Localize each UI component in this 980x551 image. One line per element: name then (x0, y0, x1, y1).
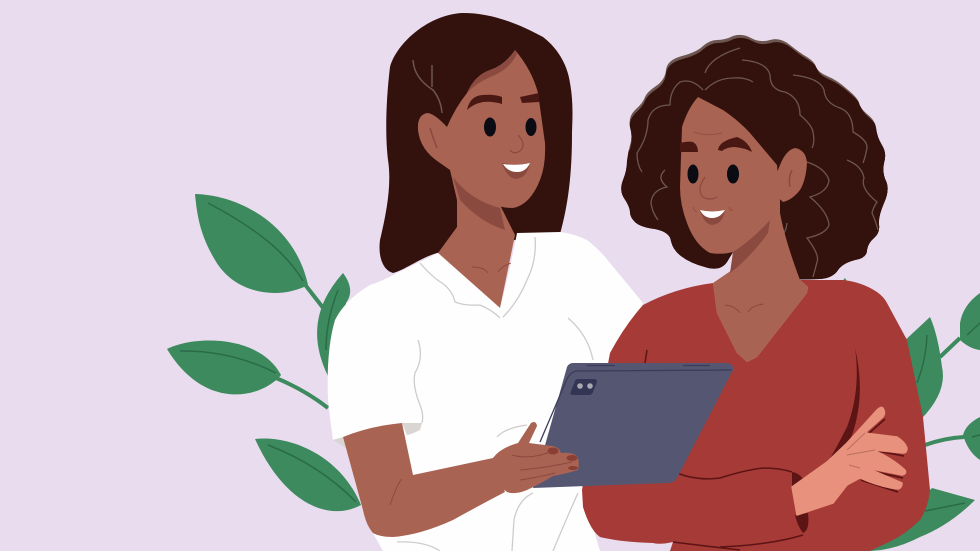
curly hair (621, 34, 888, 280)
hair strands (413, 60, 442, 113)
hand shape (792, 407, 907, 515)
leaf: right tall (900, 317, 943, 425)
tablet (533, 363, 733, 488)
shirt creases (397, 237, 593, 551)
woman in white shirt (328, 13, 643, 551)
leaf: bottom right (870, 488, 975, 551)
red sweater (582, 280, 930, 551)
ear (770, 148, 807, 202)
eyes (688, 164, 698, 184)
knuckle lines (847, 433, 875, 468)
finger lines (512, 452, 572, 480)
fingernails (548, 448, 558, 454)
stem: upper left (276, 282, 328, 408)
neck (438, 170, 515, 308)
eyebrows (680, 137, 752, 152)
eyes (484, 118, 496, 136)
eyebrows (467, 93, 539, 110)
leaf tip above shoulder (841, 278, 848, 283)
face (445, 50, 545, 208)
right foliage (841, 278, 980, 551)
hairline shadow (467, 50, 517, 93)
leaf: far right top (960, 293, 980, 350)
finger shadows (861, 419, 904, 492)
leaf: behind shirt (317, 273, 350, 380)
tablet bezel edge (540, 370, 732, 442)
wrinkles (693, 132, 733, 212)
top buttons (587, 364, 710, 366)
left foliage (167, 194, 361, 511)
camera module (570, 379, 597, 395)
right hand on crossed arm (792, 407, 907, 515)
hair (380, 13, 572, 273)
white shirt (328, 232, 643, 551)
sweater lines (645, 350, 803, 550)
woman in red sweater (493, 20, 930, 551)
leaf: top left (195, 194, 308, 293)
left hand holding tablet (493, 422, 579, 493)
leaf: bottom left (255, 439, 361, 511)
leaf: far right lower (963, 417, 980, 460)
nose (700, 177, 717, 199)
ear (418, 113, 455, 170)
mouth (700, 210, 725, 225)
stems (925, 338, 964, 445)
leaf: middle left (167, 341, 281, 394)
cuff openings (792, 472, 808, 533)
nose (510, 135, 523, 153)
hair curl strands (637, 48, 878, 277)
neck (713, 200, 808, 362)
face (680, 97, 780, 254)
sleeve inner (333, 423, 422, 448)
arm (343, 423, 505, 537)
sweater fold (828, 348, 860, 465)
mouth (502, 163, 530, 179)
